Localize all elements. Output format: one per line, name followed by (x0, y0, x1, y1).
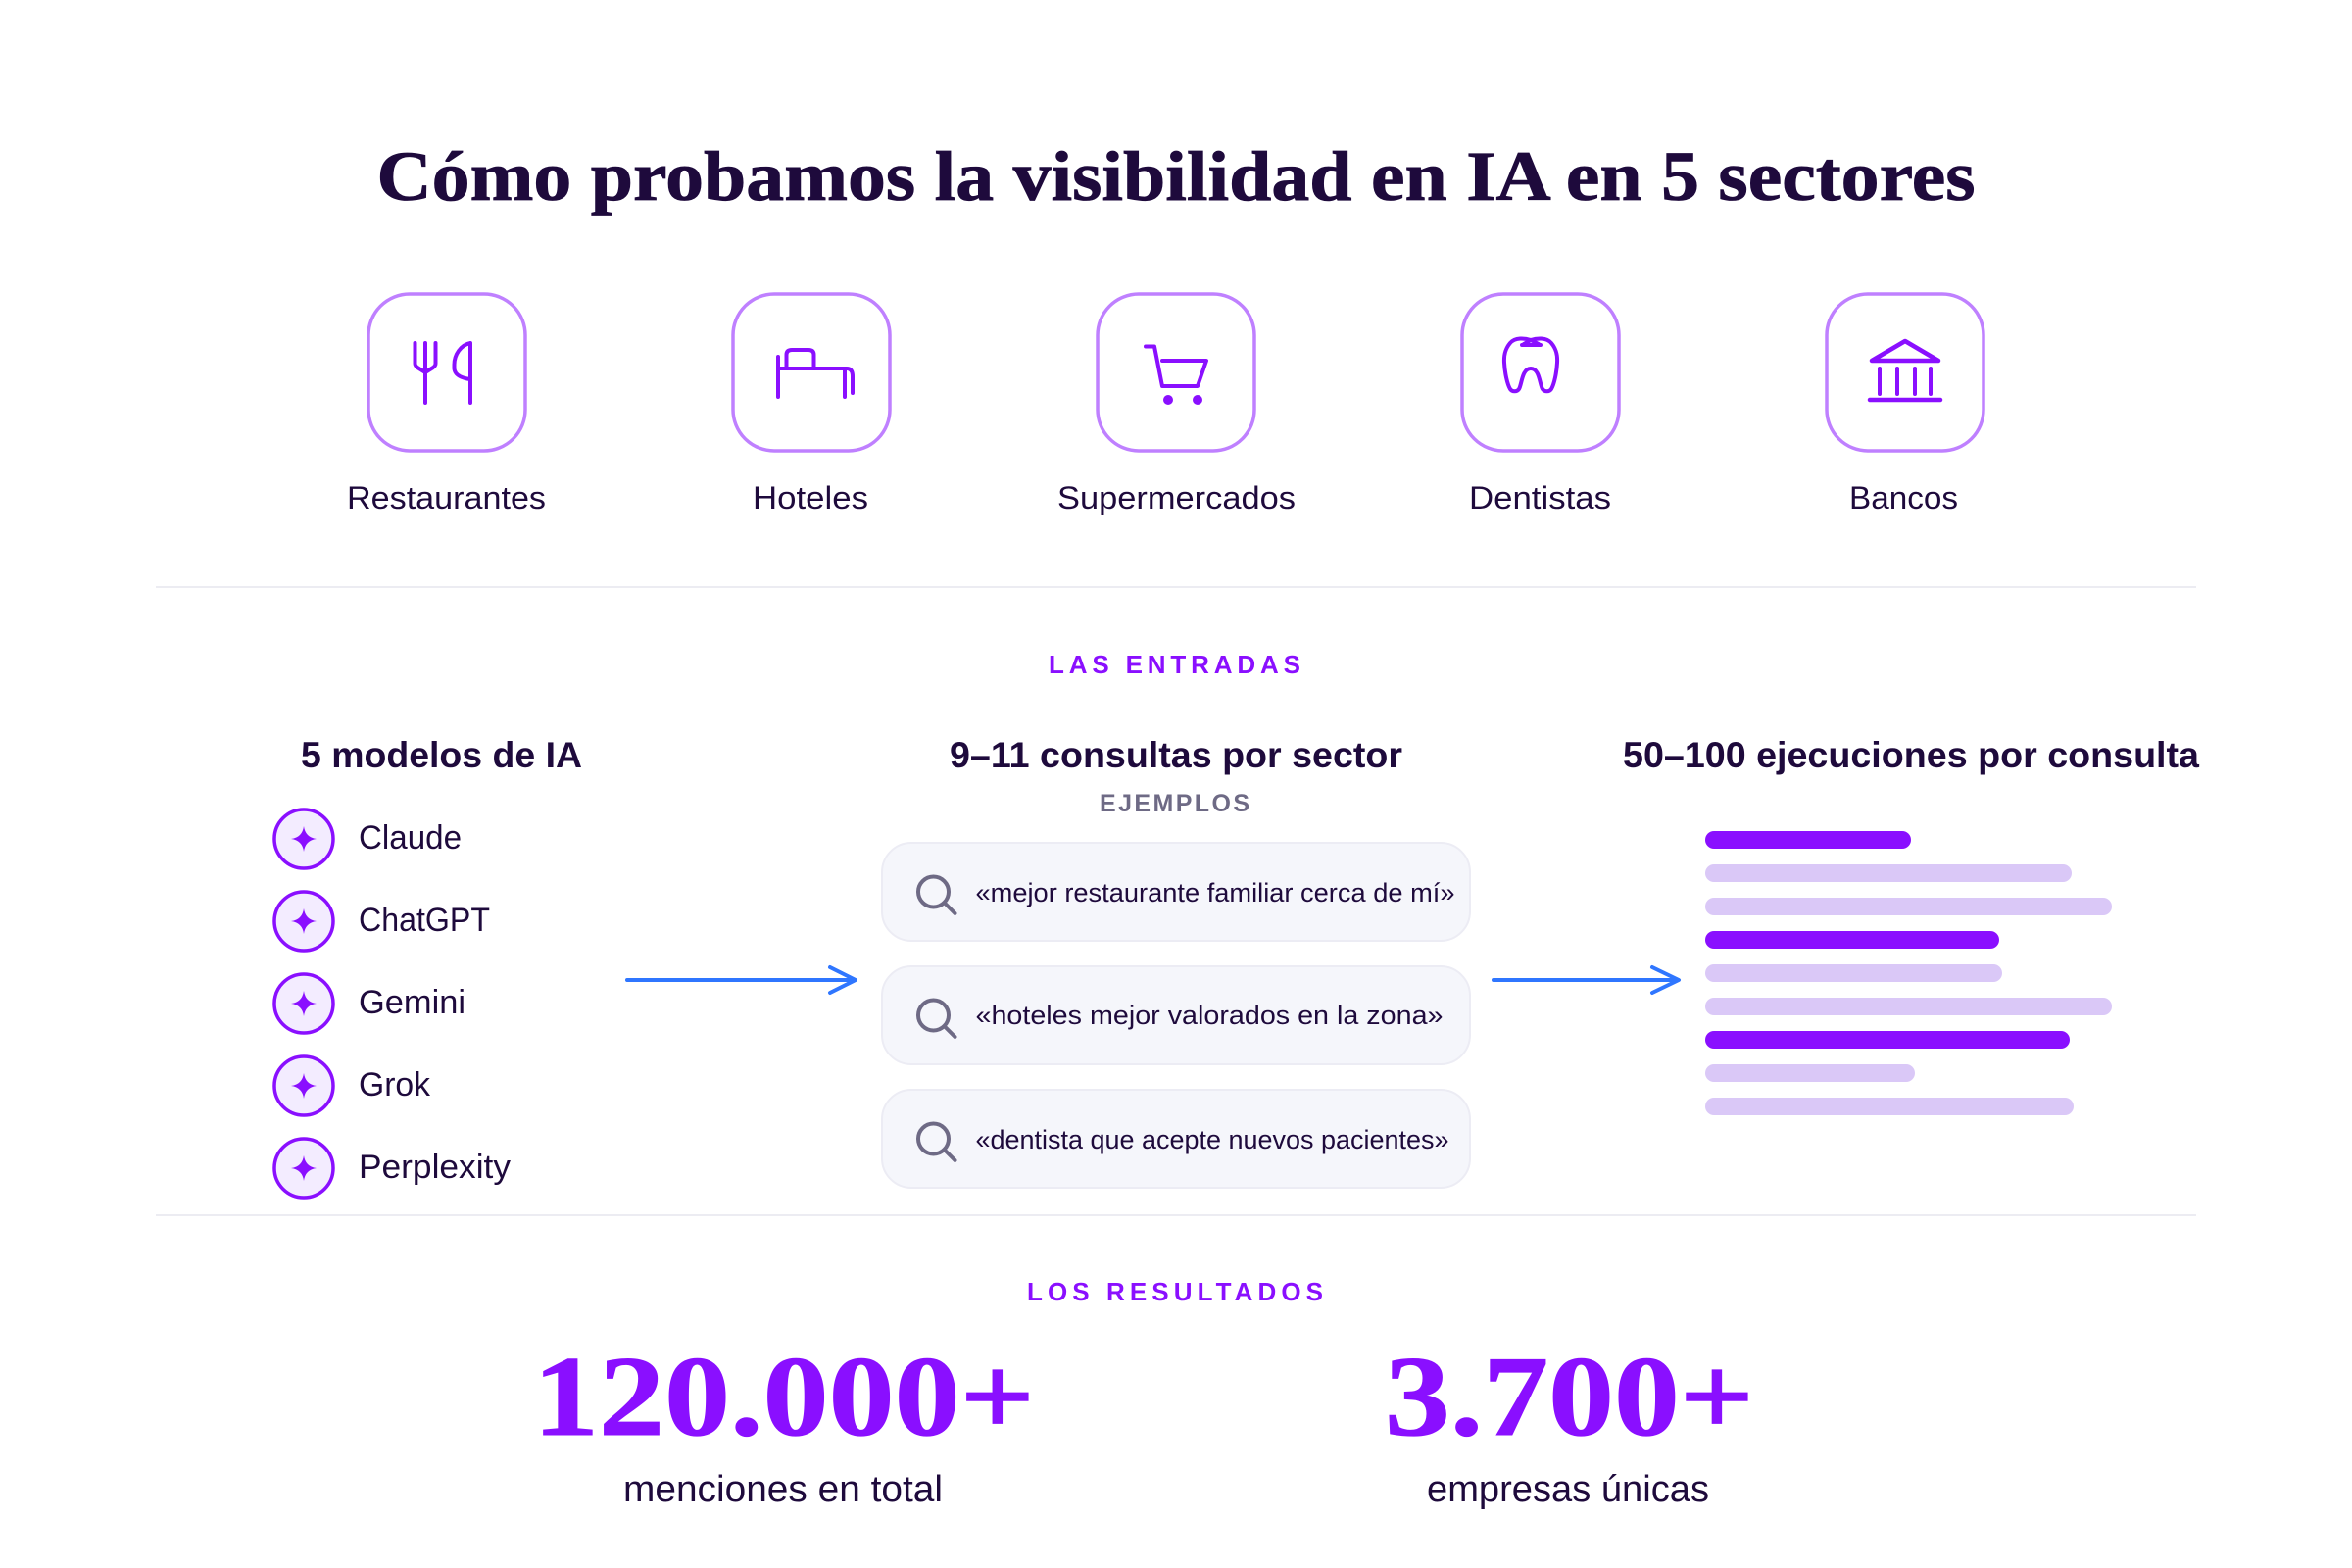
heading: Los resultados: LOS RESULTADOS (1027, 1277, 1323, 1306)
model: Grok: Grok (359, 1066, 431, 1103)
number: 3.700+: 3.700+ (1385, 1334, 1754, 1460)
arrow: queries to runs (1494, 967, 1679, 993)
icon: tooth (1462, 294, 1619, 451)
sector: Bancos (1827, 294, 1984, 515)
sector: Hoteles (733, 294, 890, 515)
heading: 9–11 consultas por sector: 9–11 consultas por sector (950, 735, 1402, 775)
icon: shopping cart (1098, 294, 1254, 451)
model: Claude: Claude (359, 819, 462, 857)
model: ChatGPT: ChatGPT (359, 902, 490, 939)
arrow: models to queries (627, 967, 856, 993)
chart: run bars (1705, 831, 2112, 1115)
label: menciones en total: menciones en total (623, 1469, 943, 1510)
heading: 50–100 ejecuciones por consulta: 50–100 ejecuciones por consulta (1623, 735, 2199, 775)
label: Restaurantes: Restaurantes (347, 480, 546, 515)
label: Hoteles: Hoteles (753, 480, 868, 515)
number: 120.000+: 120.000+ (533, 1334, 1035, 1460)
label: Supermercados: Supermercados (1057, 480, 1296, 515)
model: Perplexity (274, 1139, 511, 1198)
model: Gemini (274, 974, 466, 1033)
query card 3: «dentista que acepte nuevos pacientes» (976, 1125, 1448, 1154)
query card 2 (882, 966, 1470, 1064)
icon: fork and knife (368, 294, 525, 451)
model: Grok (274, 1056, 431, 1115)
model: Claude (274, 809, 462, 868)
query card 2: «hoteles mejor valorados en la zona» (976, 1001, 1443, 1030)
subheading: Ejemplos: EJEMPLOS (1100, 790, 1250, 817)
query card 1 (882, 843, 1470, 941)
model: Perplexity: Perplexity (359, 1149, 511, 1186)
panel: sectors row (347, 294, 1984, 515)
sector: Dentistas (1462, 294, 1619, 515)
query card 1: «mejor restaurante familiar cerca de mí» (976, 878, 1454, 907)
icon: bank (1827, 294, 1984, 451)
label: empresas únicas: empresas únicas (1427, 1469, 1709, 1510)
stat: mentions (533, 1334, 1035, 1510)
sector: Supermercados (1057, 294, 1296, 515)
label: Bancos: Bancos (1849, 480, 1958, 515)
heading: 5 modelos de IA: 5 modelos de IA (301, 735, 582, 775)
title: Cómo probamos la visibilidad en IA en 5 sectores (376, 137, 1976, 216)
model: ChatGPT (274, 892, 490, 951)
panel: queries (882, 735, 1470, 1188)
sector: Restaurantes (347, 294, 546, 515)
heading: Las entradas: LAS ENTRADAS (1049, 650, 1300, 679)
panel: AI models (274, 735, 582, 1198)
icon: bed (733, 294, 890, 451)
stat: companies (1385, 1334, 1754, 1510)
model: Gemini: Gemini (359, 984, 466, 1021)
label: Dentistas: Dentistas (1469, 480, 1611, 515)
panel: runs (1623, 735, 2199, 1115)
query card 3 (882, 1090, 1470, 1188)
